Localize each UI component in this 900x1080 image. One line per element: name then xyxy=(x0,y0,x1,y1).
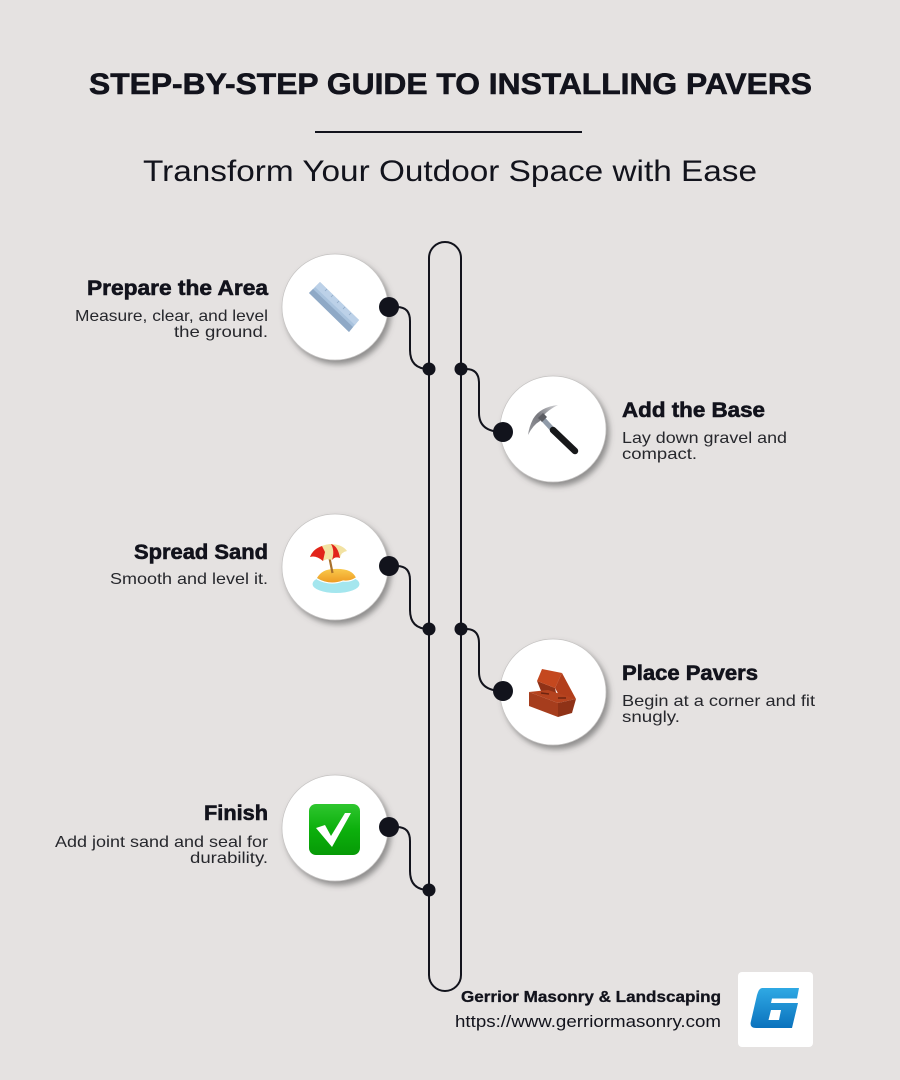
icon: check mark xyxy=(309,804,360,855)
description: durability. xyxy=(190,850,268,867)
description xyxy=(55,834,269,867)
description: snugly. xyxy=(622,709,680,726)
icon: beach umbrella on island xyxy=(310,544,360,593)
node dot xyxy=(379,817,399,837)
description xyxy=(622,430,787,463)
logo xyxy=(738,972,813,1047)
connector: place pavers xyxy=(461,629,503,691)
heading: Finish xyxy=(204,802,268,825)
heading: Prepare the Area xyxy=(87,277,268,300)
node dot xyxy=(493,681,513,701)
icon: ruler xyxy=(309,282,359,332)
company name: Gerrior Masonry & Landscaping xyxy=(461,989,721,1006)
icon: pickaxe xyxy=(528,405,575,451)
icon circle xyxy=(500,639,606,745)
heading: Add the Base xyxy=(622,399,765,422)
icon circle xyxy=(282,254,388,360)
connector: finish xyxy=(389,827,429,890)
company url: https://www.gerriormasonry.com xyxy=(455,1012,721,1031)
subtitle: Transform Your Outdoor Space with Ease xyxy=(143,155,757,188)
step 1: prepare the area xyxy=(75,254,399,360)
description xyxy=(75,308,268,341)
icon circle xyxy=(500,376,606,482)
description: Measure, clear, and level xyxy=(75,308,268,325)
heading: Place Pavers xyxy=(622,662,758,685)
node dot xyxy=(493,422,513,442)
description: Smooth and level it. xyxy=(110,571,268,588)
node dot xyxy=(379,297,399,317)
description: Lay down gravel and xyxy=(622,430,787,447)
description xyxy=(622,693,816,726)
icon: bricks xyxy=(529,669,576,717)
description: Add joint sand and seal for xyxy=(55,834,269,851)
timeline pill xyxy=(429,242,461,991)
step 4: place pavers xyxy=(493,639,816,745)
timeline junction dots xyxy=(422,362,468,896)
description: compact. xyxy=(622,446,697,463)
step 2: add the base xyxy=(493,376,787,482)
icon circle xyxy=(282,775,388,881)
step 3: spread sand xyxy=(110,514,399,620)
connector: prepare the area xyxy=(389,307,429,369)
icon circle xyxy=(282,514,388,620)
description: the ground. xyxy=(174,324,268,341)
description: Begin at a corner and fit xyxy=(622,693,816,710)
step 5: finish xyxy=(55,775,399,881)
title: STEP-BY-STEP GUIDE TO INSTALLING PAVERS xyxy=(89,68,812,101)
title divider xyxy=(315,131,582,133)
connector: add the base xyxy=(461,369,503,432)
node dot xyxy=(379,556,399,576)
connector: spread sand xyxy=(389,566,429,629)
heading: Spread Sand xyxy=(134,541,268,564)
